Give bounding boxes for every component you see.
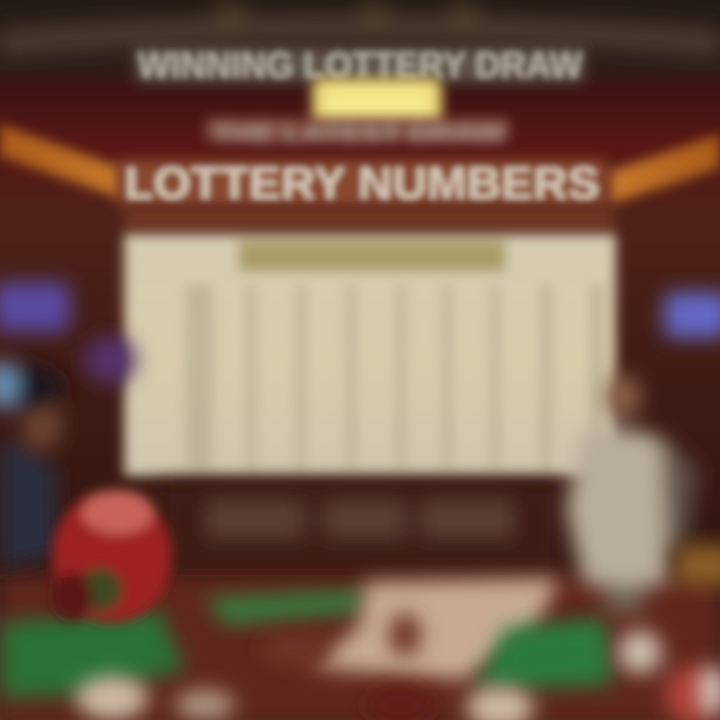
foreground chips bbox=[76, 613, 720, 720]
top heading: WINNING LOTTERY DRAW bbox=[138, 45, 583, 87]
board header plate bbox=[238, 240, 506, 272]
green table centre bbox=[205, 590, 366, 625]
results board bbox=[124, 234, 616, 476]
red ball bbox=[52, 490, 172, 622]
maroon header strip bbox=[125, 208, 615, 230]
purple lamp bbox=[84, 336, 136, 384]
sub heading: THE LATEST DRAW bbox=[213, 121, 503, 148]
cream table bbox=[310, 578, 560, 680]
lower panel bbox=[160, 484, 560, 570]
floor bbox=[0, 575, 720, 720]
right gold stall bbox=[676, 545, 720, 585]
sub heading bbox=[205, 118, 510, 148]
right screen bbox=[664, 292, 720, 338]
green table right bbox=[475, 618, 612, 690]
yellow sign bbox=[312, 78, 442, 128]
board columns bbox=[185, 285, 604, 470]
left orange beam bbox=[0, 124, 122, 198]
green table left bbox=[0, 610, 185, 698]
ceiling bbox=[0, 4, 720, 56]
left screen bbox=[0, 282, 70, 332]
left person bbox=[0, 361, 64, 570]
right person bbox=[566, 375, 698, 615]
main heading band: LOTTERY NUMBERS bbox=[124, 157, 600, 209]
right orange beam bbox=[608, 134, 720, 204]
